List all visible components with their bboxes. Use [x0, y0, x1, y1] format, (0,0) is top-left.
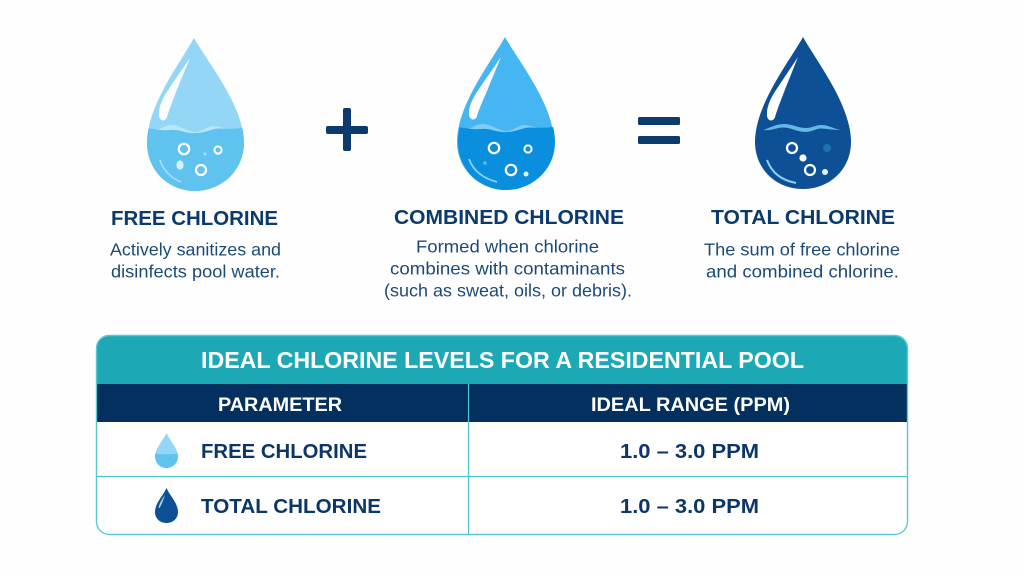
text: free chlorine description: disinfects pool water.	[111, 262, 280, 282]
column header: ideal range: IDEAL RANGE (PPM)	[591, 394, 790, 416]
row label: total chlorine: TOTAL CHLORINE	[201, 496, 381, 518]
table title: IDEAL CHLORINE LEVELS FOR A RESIDENTIAL POOL	[201, 347, 804, 373]
text: combined chlorine description: Formed when chlorine	[416, 236, 599, 256]
heading: free chlorine: FREE CHLORINE	[111, 208, 278, 230]
text: free chlorine description: Actively sanitizes and	[110, 240, 281, 260]
row label: free chlorine: FREE CHLORINE	[201, 441, 367, 463]
icon: combined chlorine drop	[457, 37, 555, 190]
row value: total chlorine range: 1.0 – 3.0 PPM	[620, 496, 759, 518]
icon: small light drop	[155, 433, 178, 468]
icon: total chlorine drop	[755, 37, 851, 189]
icon: plus sign	[326, 108, 368, 151]
heading: combined chlorine: COMBINED CHLORINE	[394, 207, 624, 229]
text: total chlorine description: The sum of free chlorine	[704, 240, 900, 260]
text: combined chlorine description: (such as sweat, oils, or debris).	[384, 280, 632, 300]
text: total chlorine description: and combined chlorine.	[706, 262, 899, 282]
icon: free chlorine drop	[147, 38, 244, 191]
text: combined chlorine description: combines with contaminants	[390, 258, 625, 278]
icon: small dark drop	[155, 488, 178, 523]
icon: equals sign	[638, 117, 680, 144]
column header: parameter: PARAMETER	[218, 394, 342, 416]
panel: ideal chlorine levels table	[96, 335, 908, 535]
row value: free chlorine range: 1.0 – 3.0 PPM	[620, 441, 759, 463]
heading: total chlorine: TOTAL CHLORINE	[711, 207, 895, 229]
